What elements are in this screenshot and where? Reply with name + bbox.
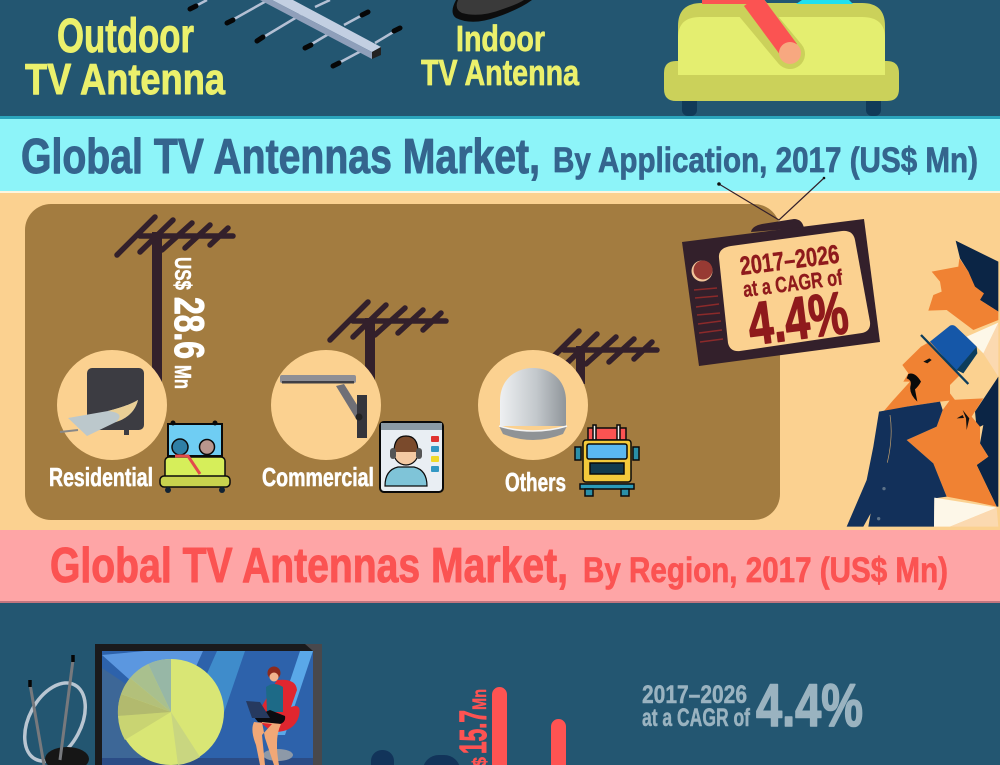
chart: bar two: [551, 719, 566, 765]
value: bar one: 15.7: [453, 710, 495, 754]
icon: outdoor yagi antenna: [190, 0, 400, 66]
label: others: Others: [505, 467, 566, 497]
callout: retro tv with CAGR: at a CAGR of: [741, 265, 844, 302]
callout: region CAGR: 4.4%: [756, 672, 863, 739]
chart: residential antenna bar: [117, 217, 233, 382]
callout: region CAGR: at a CAGR of: [642, 704, 750, 732]
value: residential: US$: [170, 257, 196, 290]
value: residential: Mn: [170, 365, 196, 389]
callout: region CAGR: 2017–2026: [642, 681, 747, 709]
icon: dome antenna: [478, 350, 588, 460]
callout: region CAGR: [642, 672, 863, 739]
icon: rabbit-ear antenna: [12, 655, 98, 765]
icon: commercial antenna: [271, 350, 381, 460]
chart: bar one: [453, 687, 507, 765]
icon: residential antenna: [57, 350, 167, 460]
illustration: woman in red chair: [246, 666, 300, 765]
heading: indoor: [421, 18, 580, 93]
heading: indoor: TV Antenna: [421, 52, 580, 93]
icon: indoor antenna base: [452, 0, 532, 22]
icon: couple on sofa: [160, 420, 230, 493]
chart: commercial antenna bar: [330, 302, 446, 382]
callout: retro tv with CAGR: 2017–2026: [738, 239, 841, 281]
illustration: widescreen tv with pie chart: [95, 644, 322, 765]
heading: application: [21, 130, 978, 184]
heading: outdoor: Outdoor: [57, 10, 194, 63]
panel: region chart: [12, 644, 863, 765]
heading: indoor: Indoor: [456, 18, 545, 59]
illustration: men looking up: [847, 241, 998, 527]
chart: pie: [118, 659, 224, 765]
label: commercial: Commercial: [262, 462, 374, 492]
label: residential: Residential: [49, 462, 153, 492]
icon: map blobs: [371, 750, 460, 765]
icon: sofa: [664, 0, 899, 116]
panel: region heading band: [0, 530, 1000, 603]
value: bar one: Mn: [470, 689, 491, 710]
icon: truck: [575, 425, 639, 496]
heading: application: Global TV Antennas Market,: [21, 130, 540, 184]
heading: outdoor: TV Antenna: [25, 55, 225, 104]
panel: application heading band: [0, 116, 1000, 193]
panel: top product strip: [0, 0, 1000, 117]
chart: others antenna bar: [541, 331, 657, 384]
value: residential: [166, 257, 213, 389]
heading: outdoor: [25, 10, 225, 104]
panel: application chart: [0, 177, 1000, 530]
icon: call agent: [380, 422, 443, 492]
callout: retro tv with CAGR: [682, 177, 880, 366]
heading: region: Global TV Antennas Market,: [50, 539, 568, 593]
callout: retro tv with CAGR: 4.4%: [744, 279, 852, 358]
value: residential: 28.6: [166, 297, 213, 359]
